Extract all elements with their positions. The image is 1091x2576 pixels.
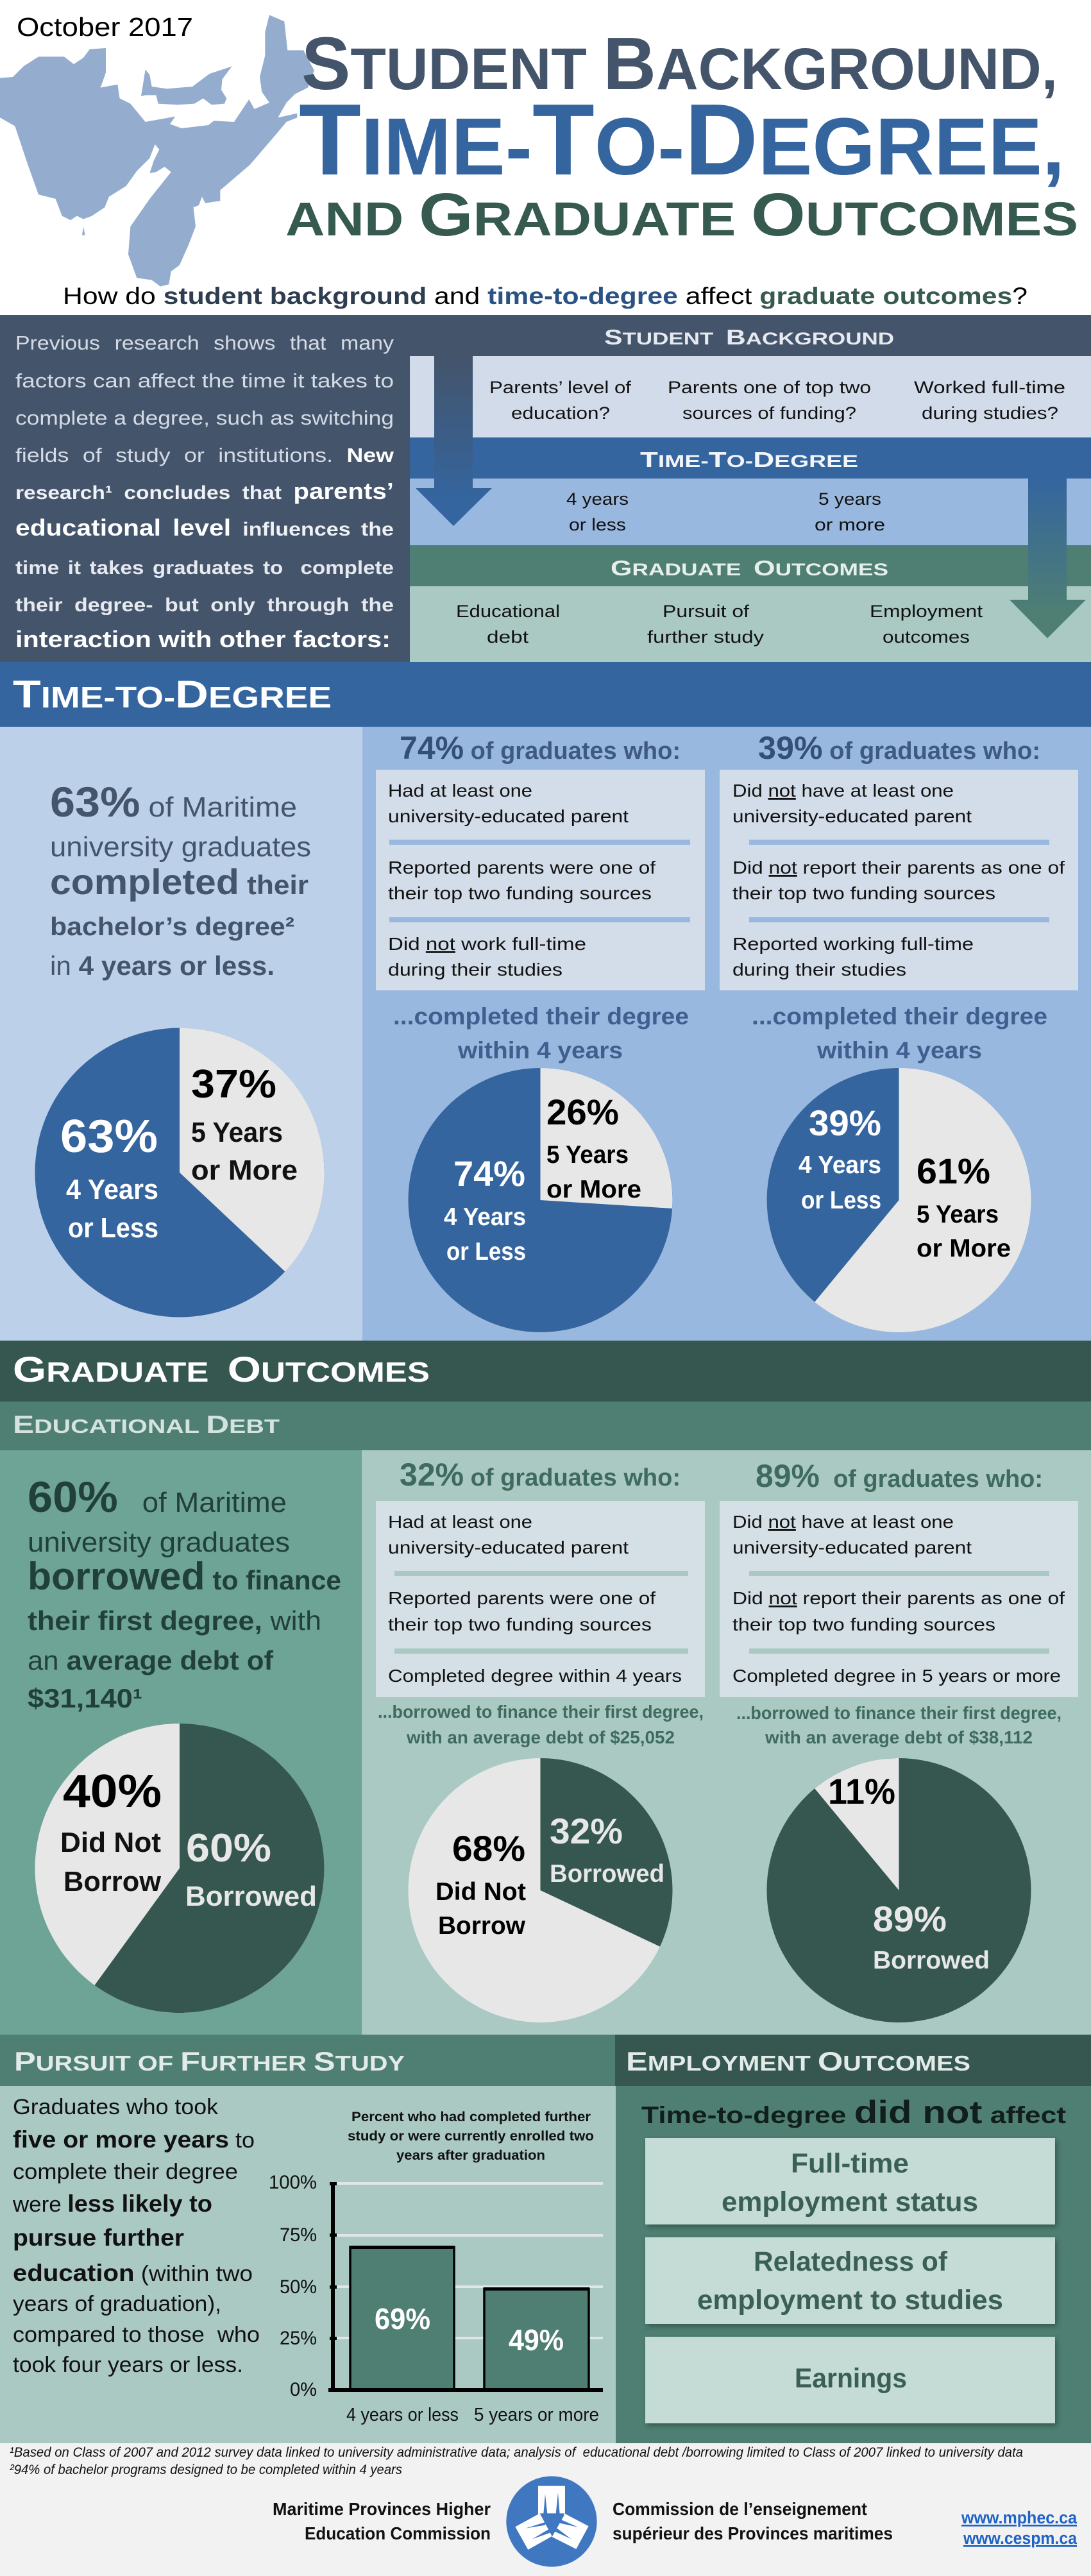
box: 74 percent criteria: during their studies <box>388 960 562 979</box>
box: relatedness: Relatedness of <box>754 2246 948 2277</box>
item: parents' level of education: education? <box>511 403 610 423</box>
label: 39 percent <box>799 1103 881 1214</box>
label: 32 percent <box>550 1811 664 1888</box>
bar: 5 years or more <box>484 2287 589 2389</box>
item: employment outcomes: outcomes <box>883 627 970 647</box>
box: 89 percent criteria: Did not have at least one <box>732 1512 954 1532</box>
box: 39 percent criteria <box>720 770 1078 990</box>
organisation name: English <box>273 2499 491 2543</box>
label: 74 percent: or Less <box>446 1238 526 1266</box>
caption: average debt 38,112 <box>736 1703 1061 1747</box>
text block: 63 percent completed: university graduates <box>50 831 311 863</box>
chart title: Percent who had completed further <box>351 2110 591 2124</box>
organisation name: English: Education Commission <box>305 2523 491 2543</box>
panel: time-to-degree comparisons <box>362 727 1091 1341</box>
title line: student background: STUDENT BACKGROUND, <box>301 22 1058 105</box>
organisation name: French: Commission de l’enseignement <box>613 2499 867 2519</box>
label: 40 percent: 40% <box>63 1766 162 1817</box>
box: 74 percent criteria: Had at least one <box>388 781 532 801</box>
pie chart: 60 and 40 <box>35 1724 325 2013</box>
caption: average debt 38,112: ...borrowed to finance their first degree, <box>736 1703 1061 1723</box>
text block: 60 percent borrowed: borrowed to finance <box>28 1555 341 1598</box>
box: 32 percent criteria: Completed degree within 4 years <box>388 1666 682 1686</box>
label: 40 percent: Borrow <box>63 1866 162 1897</box>
text block: five or more years: compared to those who <box>13 2323 260 2347</box>
item: parents funding <box>668 378 871 423</box>
panel: time-to-degree overall <box>0 727 362 1341</box>
organisation name: English: Maritime Provinces Higher <box>273 2499 491 2519</box>
text block: five or more years: years of graduation), <box>13 2292 221 2316</box>
footer <box>0 2443 1091 2576</box>
item: parents funding: sources of funding? <box>682 403 856 423</box>
label: 26 percent: 5 Years <box>546 1141 629 1169</box>
item: worked full-time <box>914 378 1065 423</box>
text block: 60 percent borrowed <box>28 1473 341 1713</box>
x axis labels: 5 years or more <box>474 2405 599 2425</box>
text block: previous research: research¹ concludes that parents’ <box>15 478 394 504</box>
chart title <box>348 2110 594 2163</box>
text block: five or more years: education (within two <box>13 2260 253 2286</box>
label: 61 percent: 5 Years <box>917 1201 999 1228</box>
label: 39 percent: 4 Years <box>799 1151 881 1179</box>
panel: educational debt overall <box>0 1450 362 2035</box>
label: 63 percent: 63% <box>60 1111 158 1162</box>
label: 39 percent: 39% <box>809 1103 881 1143</box>
item: educational debt: debt <box>487 627 529 647</box>
text block: previous research: complete a degree, such as switching <box>15 407 394 429</box>
statement: did not affect: Time-to-degree did not affect <box>641 2094 1066 2130</box>
label: 60 percent: Borrowed <box>185 1881 317 1912</box>
label: 39 percent: or Less <box>801 1187 881 1214</box>
item: parents' level of education <box>489 378 632 423</box>
heading: 74 percent: 74% of graduates who: <box>400 730 681 766</box>
text block: five or more years: Graduates who took <box>13 2095 219 2119</box>
box: 32 percent criteria: university-educated parent <box>388 1538 629 1557</box>
box: 39 percent criteria: Did not have at least one <box>732 781 954 801</box>
y axis labels <box>269 2172 317 2400</box>
label: 60 percent: 60% <box>186 1826 271 1870</box>
label: 40 percent: Did Not <box>60 1827 161 1858</box>
chart title: years after graduation <box>396 2148 545 2163</box>
websites: www.mphec.ca <box>961 2508 1078 2527</box>
caption: completed within 4 years, left: ...completed their degree <box>393 1003 689 1030</box>
item: pursuit of further study: further study <box>647 627 765 647</box>
item: parents' level of education: Parents’ level of <box>489 378 632 397</box>
item: employment outcomes: Employment <box>870 602 983 621</box>
y axis labels: 100% <box>269 2172 317 2193</box>
item: worked full-time: during studies? <box>922 403 1058 423</box>
label: 40 percent <box>60 1766 162 1897</box>
x axis labels <box>346 2405 599 2425</box>
panel: graduate outcomes row <box>410 545 1091 662</box>
bar: 4 years or less: 69% <box>375 2302 430 2335</box>
text block: previous research: time it takes graduates to complete <box>15 557 394 579</box>
text block: previous research <box>15 332 394 652</box>
box: 74 percent criteria <box>376 770 705 990</box>
box: 32 percent criteria <box>376 1501 705 1697</box>
y axis labels: 0% <box>290 2379 317 2400</box>
title line: time-to-degree: TIME-TO-DEGREE, <box>299 83 1065 196</box>
arrow: time-to-degree to outcomes <box>1010 479 1086 638</box>
pie chart: 39 and 61 <box>767 1068 1031 1332</box>
bar: 4 years or less <box>350 2246 454 2389</box>
footnotes: ²94% of bachelor programs designed to be completed within 4 years <box>10 2462 402 2477</box>
pie chart: 32 and 68 <box>408 1758 673 2022</box>
text block: previous research: interaction with other factors: <box>15 626 391 652</box>
box: earnings: Earnings <box>795 2363 907 2394</box>
organisation name: French: supérieur des Provinces maritimes <box>613 2523 893 2543</box>
label: 37 percent: 5 Years <box>191 1117 283 1148</box>
text block: five or more years: were less likely to <box>12 2190 212 2217</box>
text block: previous research: fields of study or institutions. New <box>15 444 394 466</box>
item: 4 years or less: or less <box>569 515 626 534</box>
item: pursuit of further study <box>647 602 765 647</box>
websites <box>961 2508 1078 2548</box>
heading: 32 percent: 32% of graduates who: <box>400 1457 681 1493</box>
label: 63 percent: or Less <box>68 1212 158 1244</box>
logo <box>506 2476 597 2567</box>
label: 68 percent: 68% <box>452 1828 525 1868</box>
x axis labels: 4 years or less <box>346 2405 459 2425</box>
label: 63 percent <box>60 1111 158 1244</box>
label: 89 percent <box>873 1899 990 1974</box>
text block: 60 percent borrowed: 60% of Maritime <box>28 1473 287 1521</box>
label: 11 percent: 11% <box>828 1771 895 1811</box>
box: 74 percent criteria: university-educated parent <box>388 806 629 826</box>
item: educational debt <box>456 602 560 647</box>
y axis labels: 50% <box>280 2276 317 2298</box>
box: full-time employment status: Full-time <box>791 2148 909 2179</box>
heading: 39 percent: 39% of graduates who: <box>758 730 1040 766</box>
label: 74 percent: 74% <box>453 1153 525 1194</box>
text block: 60 percent borrowed: university graduates <box>28 1527 290 1558</box>
text block: five or more years: complete their degree <box>13 2160 238 2184</box>
box: earnings <box>645 2337 1055 2423</box>
label: 68 percent <box>436 1828 526 1940</box>
label: 74 percent: 4 Years <box>444 1203 526 1231</box>
heading: graduate outcomes: G RADUATE O UTCOMES <box>611 556 888 580</box>
section banner: time-to-degree: TIME-TO- DEGREE <box>13 673 332 716</box>
text block: previous research: their degree- but only through the <box>15 595 394 616</box>
text block: 60 percent borrowed: an average debt of <box>28 1645 274 1675</box>
box: 89 percent criteria: Completed degree in 5 years or more <box>732 1666 1061 1686</box>
label: 61 percent <box>917 1151 1011 1262</box>
title <box>285 22 1078 249</box>
sub-banner: educational debt <box>0 1402 1091 1450</box>
heading: time-to-degree: T IME- T O- D EGREE <box>640 448 858 471</box>
text block: 63 percent completed: bachelor’s degree² <box>50 913 294 941</box>
label: 89 percent: 89% <box>873 1899 947 1939</box>
label: 61 percent: 61% <box>917 1151 990 1191</box>
box: 89 percent criteria: Did not report their parents as one of <box>732 1588 1065 1608</box>
footnotes: ¹Based on Class of 2007 and 2012 survey data linked to university administrative data; analysis of educational debt /borrowing limited to Class of 2007 linked to university data <box>10 2445 1023 2460</box>
section banner: graduate outcomes <box>0 1341 1091 1402</box>
y axis labels: 25% <box>280 2328 317 2349</box>
y axis labels: 75% <box>280 2224 317 2246</box>
box: 32 percent criteria: Had at least one <box>388 1512 532 1532</box>
section banner: graduate outcomes: GRADUATE OUTCOMES <box>13 1349 430 1389</box>
text block: five or more years: five or more years to <box>13 2126 255 2153</box>
box: 89 percent criteria: university-educated parent <box>732 1538 972 1557</box>
panel: employment outcomes <box>615 2035 1091 2443</box>
label: 68 percent: Did Not <box>436 1878 526 1906</box>
caption: completed within 4 years, left <box>393 1003 689 1063</box>
box: 89 percent criteria: their top two funding sources <box>732 1614 995 1634</box>
box: 39 percent criteria: Reported working full-time <box>732 934 974 954</box>
label: 32 percent: 32% <box>550 1811 623 1851</box>
box: 89 percent criteria <box>720 1501 1078 1697</box>
panel: pursuit of further study <box>0 2035 616 2443</box>
box: full-time employment status: employment status <box>722 2187 978 2217</box>
item: 5 years or more: 5 years <box>818 489 881 509</box>
text block: previous research: Previous research shows that many <box>15 332 394 354</box>
sub-banner: educational debt: EDUCATIONAL DEBT <box>13 1411 280 1439</box>
box: 39 percent criteria: Did not report their parents as one of <box>732 858 1065 877</box>
item: employment outcomes <box>870 602 983 647</box>
caption: average debt 25,052 <box>378 1702 704 1747</box>
heading: employment outcomes: EMPLOYMENT OUTCOMES <box>626 2046 970 2076</box>
box: 32 percent criteria: their top two funding sources <box>388 1614 652 1634</box>
box: 39 percent criteria: university-educated parent <box>732 806 972 826</box>
label: 68 percent: Borrow <box>438 1912 526 1940</box>
caption: average debt 38,112: with an average debt of $38,112 <box>765 1727 1033 1747</box>
caption: completed within 4 years, right: within 4 years <box>816 1037 982 1063</box>
panel: intro text <box>0 315 410 662</box>
organisation name: French <box>613 2499 893 2543</box>
label: 32 percent: Borrowed <box>550 1860 664 1888</box>
section banner: time-to-degree <box>0 662 1091 727</box>
box: 39 percent criteria: their top two funding sources <box>732 883 995 903</box>
label: 74 percent <box>444 1153 526 1266</box>
item: worked full-time: Worked full-time <box>914 378 1065 397</box>
caption: completed within 4 years, right: ...completed their degree <box>752 1003 1047 1030</box>
pie chart: 89 and 11 <box>767 1758 1031 2022</box>
box: 74 percent criteria: their top two funding sources <box>388 883 652 903</box>
icon: map of the Maritime provinces <box>0 15 314 287</box>
caption: completed within 4 years, left: within 4 years <box>457 1037 623 1063</box>
text block: five or more years <box>12 2095 260 2377</box>
label: 37 percent: 37% <box>191 1062 276 1106</box>
panel: time-to-degree row <box>410 437 1091 545</box>
label: 37 percent <box>191 1062 298 1186</box>
label: 26 percent <box>546 1092 641 1203</box>
box: full-time employment status <box>645 2138 1055 2224</box>
box: 39 percent criteria: during their studies <box>732 960 906 979</box>
websites: www.cespm.ca <box>963 2529 1078 2548</box>
label: 26 percent: or More <box>546 1176 641 1203</box>
bar chart: further study <box>269 2110 603 2425</box>
heading: 89 percent: 89% of graduates who: <box>756 1458 1043 1494</box>
item: parents funding: Parents one of top two <box>668 378 871 397</box>
text block: previous research: educational level influences the <box>15 514 394 541</box>
text block: five or more years: pursue further <box>13 2224 184 2251</box>
item: pursuit of further study: Pursuit of <box>663 602 750 621</box>
date: October 2017 <box>17 12 193 42</box>
text block: 60 percent borrowed: $31,140¹ <box>28 1683 142 1713</box>
item: 5 years or more <box>815 489 885 534</box>
text block: 63 percent completed <box>50 778 311 981</box>
heading: pursuit of further study: PURSUIT OF FURTHER STUDY <box>14 2046 405 2076</box>
item: educational debt: Educational <box>456 602 560 621</box>
text block: five or more years: took four years or less. <box>13 2353 243 2377</box>
panel: student background row <box>410 315 1091 437</box>
box: relatedness <box>645 2237 1055 2324</box>
item: 5 years or more: or more <box>815 515 885 534</box>
box: 32 percent criteria: Reported parents were one of <box>388 1588 655 1608</box>
caption: average debt 25,052: ...borrowed to finance their first degree, <box>378 1702 704 1722</box>
label: 26 percent: 26% <box>546 1092 619 1132</box>
box: relatedness: employment to studies <box>697 2285 1003 2316</box>
text block: previous research: factors can affect the time it takes to <box>15 369 394 392</box>
footnotes <box>10 2445 1023 2477</box>
text block: 63 percent completed: completed their <box>50 861 309 902</box>
text block: 63 percent completed: in 4 years or less. <box>50 951 275 981</box>
title line: graduate outcomes: AND GRADUATE OUTCOMES <box>285 181 1078 249</box>
heading: student background: STUDENT B ACKGROUND <box>604 325 894 349</box>
subtitle question: How do student background and time-to-degree affect graduate outcomes ? <box>63 283 1028 309</box>
arrow: background to time-to-degree <box>416 356 492 526</box>
chart title: study or were currently enrolled two <box>348 2129 594 2144</box>
label: 89 percent: Borrowed <box>873 1947 990 1974</box>
text block: 60 percent borrowed: their first degree, with <box>28 1606 321 1636</box>
pie chart: 74 and 26 <box>408 1068 672 1332</box>
box: 74 percent criteria: Reported parents were one of <box>388 858 655 877</box>
item: 4 years or less: 4 years <box>566 489 629 509</box>
label: 37 percent: or More <box>191 1155 298 1186</box>
pie chart: 63 and 37 <box>35 1028 325 1318</box>
caption: completed within 4 years, right <box>752 1003 1047 1063</box>
label: 60 percent <box>185 1826 317 1912</box>
caption: average debt 25,052: with an average debt of $25,052 <box>406 1727 675 1747</box>
text block: 63 percent completed: 63% of Maritime <box>50 778 297 826</box>
item: 4 years or less <box>566 489 629 534</box>
label: 61 percent: or More <box>917 1235 1011 1262</box>
bar: 5 years or more: 49% <box>509 2323 564 2357</box>
panel: educational debt comparisons <box>362 1450 1091 2035</box>
label: 63 percent: 4 Years <box>66 1174 158 1205</box>
box: 74 percent criteria: Did not work full-time <box>388 934 586 954</box>
